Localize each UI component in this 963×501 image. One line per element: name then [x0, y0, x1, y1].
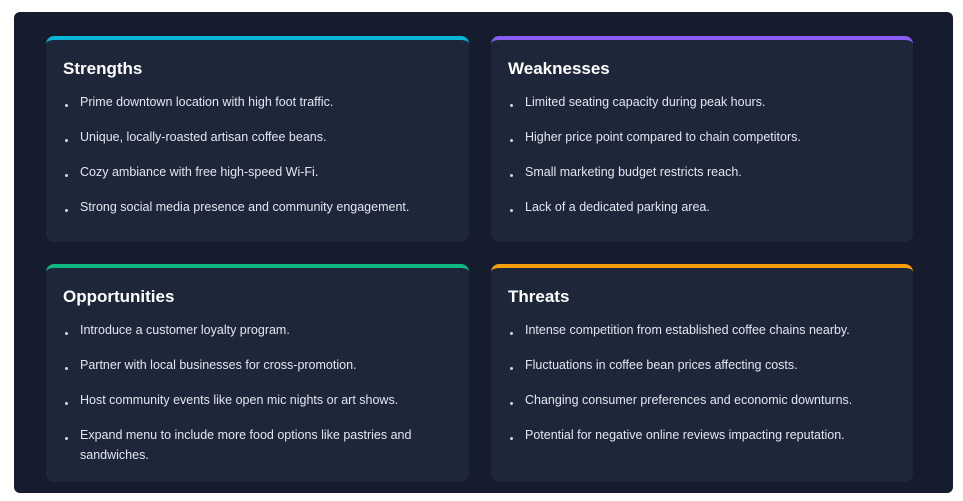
- list: threats: Changing consumer preferences and economic downturns.: [525, 393, 852, 407]
- heading: strengths: Strengths: [63, 59, 142, 78]
- list: opportunities: Expand menu to include more food options like pastries and sandwiches.: [80, 428, 411, 462]
- list: opportunities: [65, 323, 411, 462]
- list: threats: Fluctuations in coffee bean prices affecting costs.: [525, 358, 798, 372]
- list: weaknesses: Small marketing budget restricts reach.: [525, 165, 742, 179]
- panel: threats: [491, 264, 913, 482]
- heading: opportunities: Opportunities: [63, 287, 174, 306]
- list: strengths: Strong social media presence and community engagement.: [80, 200, 409, 214]
- list: strengths: Cozy ambiance with free high-speed Wi-Fi.: [80, 165, 318, 179]
- list: opportunities: Partner with local businesses for cross-promotion.: [80, 358, 357, 372]
- list: threats: Intense competition from established coffee chains nearby.: [525, 323, 850, 337]
- list: strengths: Unique, locally-roasted artisan coffee beans.: [80, 130, 326, 144]
- list: strengths: [65, 95, 409, 214]
- heading: weaknesses: Weaknesses: [508, 59, 610, 78]
- panel: opportunities: [46, 264, 469, 482]
- heading: threats: Threats: [508, 287, 569, 306]
- list: threats: [510, 323, 852, 442]
- list: opportunities: Host community events like open mic nights or art shows.: [80, 393, 398, 407]
- list: weaknesses: [510, 95, 801, 214]
- list: weaknesses: Lack of a dedicated parking area.: [525, 200, 710, 214]
- panel: strengths: [46, 36, 469, 242]
- list: opportunities: Introduce a customer loyalty program.: [80, 323, 290, 337]
- list: threats: Potential for negative online reviews impacting reputation.: [525, 428, 845, 442]
- list: weaknesses: Limited seating capacity during peak hours.: [525, 95, 765, 109]
- list: weaknesses: Higher price point compared to chain competitors.: [525, 130, 801, 144]
- panel: weaknesses: [491, 36, 913, 242]
- list: strengths: Prime downtown location with high foot traffic.: [80, 95, 333, 109]
